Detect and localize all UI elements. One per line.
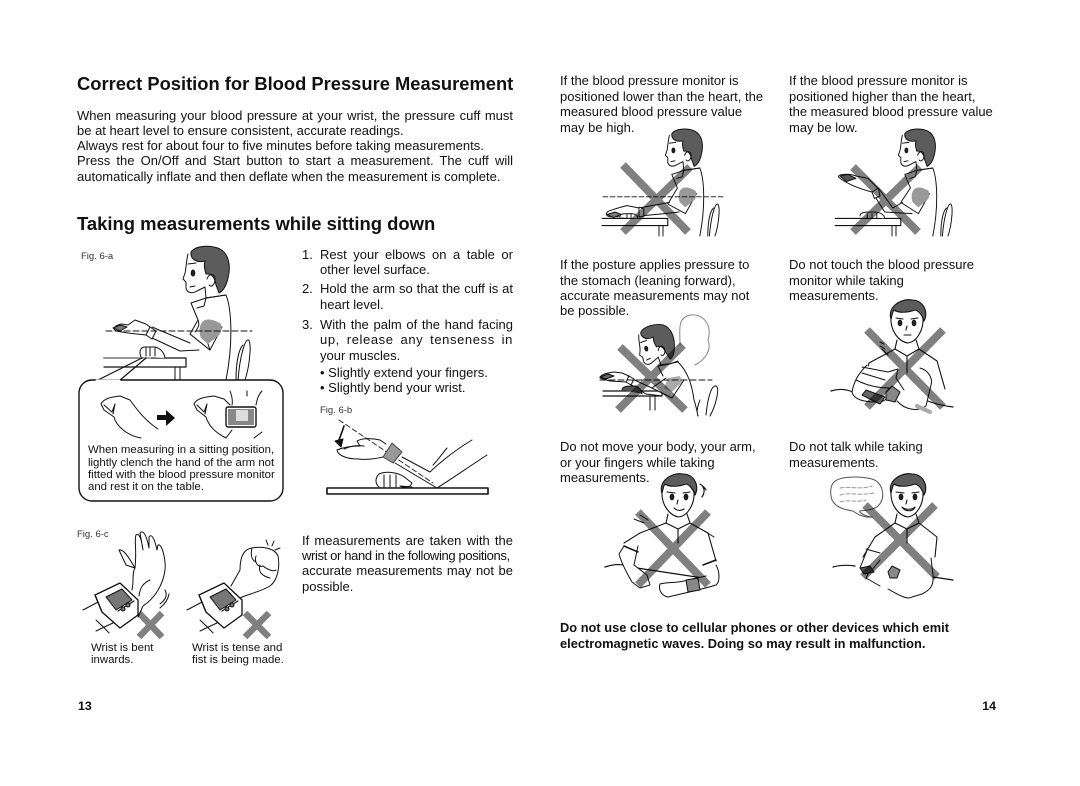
page number 13: 13 bbox=[78, 699, 92, 713]
text block: wrist positions bbox=[302, 533, 513, 594]
text: do not talk: Do not talk while taking bbox=[789, 439, 923, 454]
numbered steps: heart level. bbox=[320, 297, 384, 312]
text: do not talk bbox=[789, 439, 923, 470]
text: monitor lower than heart: measured blood pressure value bbox=[560, 104, 742, 119]
cross mark bbox=[623, 165, 690, 232]
numbered steps: other level surface. bbox=[320, 262, 430, 277]
page number 14: 14 bbox=[982, 699, 996, 713]
warning: electromagnetic devices bbox=[560, 620, 949, 651]
numbered steps: • Slightly extend your fingers. bbox=[320, 365, 488, 380]
numbered steps: 3. bbox=[302, 317, 313, 332]
cross mark bbox=[245, 613, 269, 637]
warning: electromagnetic devices: Do not use close to cellular phones or other devices which emit bbox=[560, 620, 949, 635]
callout text: fitted with the blood pressure monitor bbox=[88, 469, 275, 481]
label: Fig. 6-b: Fig. 6-b bbox=[320, 405, 352, 416]
cross mark bbox=[863, 505, 937, 577]
title: Correct Position for Blood Pressure Measurement bbox=[77, 73, 513, 94]
text: leaning forward bbox=[560, 257, 750, 318]
text block: intro: be at heart level to ensure consistent, accurate readings. bbox=[77, 123, 404, 138]
text block: wrist positions: wrist or hand in the following positions, bbox=[302, 548, 510, 563]
text block: wrist positions: If measurements are taken with the bbox=[302, 533, 513, 548]
text: monitor higher than heart bbox=[789, 73, 993, 135]
illustration: monitor lower than heart bbox=[602, 129, 723, 236]
text: do not move: Do not move your body, your arm, bbox=[560, 439, 756, 454]
text block: intro: When measuring your blood pressure at your wrist, the pressure cuff must bbox=[77, 108, 513, 123]
text: do not touch: Do not touch the blood pressure bbox=[789, 257, 974, 272]
text block: intro: automatically inflate and then deflate when the measurement is complete. bbox=[77, 169, 500, 184]
text: do not touch: measurements. bbox=[789, 288, 879, 303]
text block: intro bbox=[77, 108, 513, 184]
numbered steps: 1. bbox=[302, 247, 313, 262]
caption: wrist tense bbox=[192, 642, 284, 666]
callout text: When measuring in a sitting position, bbox=[88, 444, 274, 456]
caption: wrist bent bbox=[91, 642, 154, 666]
warning: electromagnetic devices: electromagnetic waves. Doing so may result in malfunction. bbox=[560, 636, 925, 651]
text: leaning forward: accurate measurements may not bbox=[560, 288, 749, 303]
label: Fig. 6-c: Fig. 6-c bbox=[77, 529, 109, 540]
text: monitor higher than heart: may be low. bbox=[789, 120, 858, 135]
heading: sitting down: Taking measurements while sitting down bbox=[77, 213, 435, 234]
text: monitor higher than heart: positioned higher than the heart, bbox=[789, 89, 975, 104]
text: do not move: or your fingers while taking bbox=[560, 455, 715, 470]
callout text: lightly clench the hand of the arm not bbox=[88, 456, 274, 468]
illustration: talking during measurement bbox=[831, 474, 953, 598]
caption: wrist tense: fist is being made. bbox=[192, 654, 284, 666]
text: monitor higher than heart: the measured blood pressure value bbox=[789, 104, 993, 119]
cross mark bbox=[139, 613, 162, 637]
numbered steps: Hold the arm so that the cuff is at bbox=[320, 281, 513, 296]
numbered steps: • Slightly bend your wrist. bbox=[320, 380, 465, 395]
numbered steps: 2. bbox=[302, 281, 313, 296]
cross mark bbox=[867, 330, 943, 407]
numbered steps bbox=[302, 247, 513, 395]
caption: wrist bent: inwards. bbox=[91, 654, 133, 666]
caption: wrist tense: Wrist is tense and bbox=[192, 642, 282, 654]
illustration: touching the monitor bbox=[831, 300, 953, 412]
text: leaning forward: If the posture applies pressure to bbox=[560, 257, 749, 272]
text block: wrist positions: accurate measurements may not be bbox=[302, 563, 513, 578]
icon: arrow bbox=[157, 410, 175, 426]
text: monitor lower than heart bbox=[560, 73, 763, 135]
text block: wrist positions: possible. bbox=[302, 579, 353, 594]
numbered steps: Rest your elbows on a table or bbox=[320, 247, 513, 262]
numbered steps: up, release any tenseness in bbox=[320, 332, 513, 347]
text block: intro: Always rest for about four to five minutes before taking measurements. bbox=[77, 138, 484, 153]
figure 6-a: seated man with arm raised to heart level bbox=[104, 246, 252, 380]
cross mark bbox=[618, 345, 685, 410]
text block: intro: Press the On/Off and Start button to start a measurement. The cuff will bbox=[77, 153, 513, 168]
illustration: moving body bbox=[605, 474, 719, 597]
text: monitor lower than heart: If the blood pressure monitor is bbox=[560, 73, 738, 88]
figure 6-b: arm resting on fist on table bbox=[327, 420, 488, 494]
text: do not move: measurements. bbox=[560, 470, 650, 485]
text: monitor lower than heart: may be high. bbox=[560, 120, 634, 135]
illustration: leaning forward bbox=[600, 315, 718, 416]
numbered steps: your muscles. bbox=[320, 348, 400, 363]
figure 6-c: wrist bent inwards bbox=[83, 532, 169, 637]
text: do not touch: monitor while taking bbox=[789, 273, 904, 288]
numbered steps: With the palm of the hand facing bbox=[320, 317, 513, 332]
cross mark bbox=[853, 167, 920, 232]
callout text: and rest it on the table. bbox=[88, 481, 204, 493]
caption: wrist bent: Wrist is bent bbox=[91, 642, 153, 654]
text: leaning forward: the stomach (leaning forward), bbox=[560, 273, 736, 288]
callout box: clench hand bbox=[79, 358, 283, 501]
text: leaning forward: be possible. bbox=[560, 303, 629, 318]
callout text bbox=[88, 444, 275, 493]
figure 6-c: wrist tense, fist made bbox=[187, 540, 280, 637]
illustration: monitor higher than heart bbox=[835, 129, 952, 236]
text: do not talk: measurements. bbox=[789, 455, 879, 470]
text: monitor higher than heart: If the blood pressure monitor is bbox=[789, 73, 967, 88]
text: do not touch bbox=[789, 257, 974, 303]
cross mark bbox=[638, 512, 708, 585]
text: do not move bbox=[560, 439, 756, 485]
label: Fig. 6-a: Fig. 6-a bbox=[81, 251, 113, 262]
text: monitor lower than heart: positioned lower than the heart, the bbox=[560, 89, 763, 104]
